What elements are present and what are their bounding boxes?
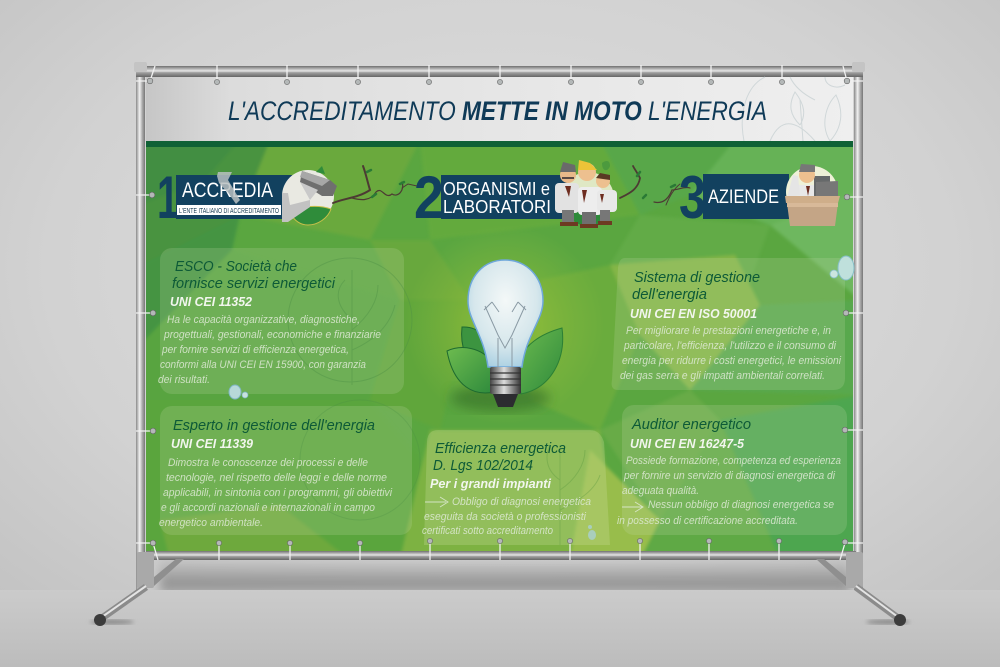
header stripe (146, 141, 853, 147)
left foot (90, 586, 146, 626)
body: Esperto: e gli accordi nazionali e internazionali in campo (161, 502, 375, 514)
body: ESCO: conformi alla UNI CEI EN 15900, con garanzia (160, 359, 366, 371)
body: ESCO: Ha le capacità organizzative, diagnostiche, (167, 314, 360, 326)
title: L'ACCREDITAMENTO METTE IN MOTO L'ENERGIA (228, 96, 767, 126)
body: Sistema: Per migliorare le prestazioni energetiche e, in (626, 325, 831, 337)
norm: UNI CEI EN ISO 50001: UNI CEI EN ISO 50001 (630, 306, 757, 321)
label 1: Accredia (157, 164, 337, 231)
body: ESCO (158, 314, 381, 386)
arrow: Nessun obbligo (622, 502, 643, 512)
body: Esperto: tecnologie, nel rispetto delle leggi e delle norme (166, 472, 387, 484)
body: ESCO: dei risultati. (158, 374, 210, 386)
icon: manager at desk (785, 164, 840, 226)
leaf back (462, 327, 496, 372)
label 2: Organismi e Laboratori (414, 160, 617, 231)
body: Esperto: energetico ambientale. (159, 517, 263, 529)
heading: Sistema: Sistema di gestione (634, 269, 760, 286)
branch between 2 and 3 (620, 166, 690, 205)
banner header band (146, 77, 853, 142)
panel: ESCO (158, 248, 412, 394)
label 3: Aziende (679, 164, 840, 231)
body: Sistema: dei gas serra e gli impatti ambientali correlati. (620, 370, 825, 382)
name: LABORATORI (443, 197, 551, 217)
body: ESCO: progettuali, gestionali, economiche e finanziarie (163, 329, 381, 341)
body: Esperto: applicabili, in sintonia con i programmi, gli obiettivi (163, 487, 393, 499)
norm: UNI CEI 11339: UNI CEI 11339 (171, 436, 254, 451)
norm: UNI CEI EN 16247-5: UNI CEI EN 16247-5 (630, 436, 745, 451)
heading: ESCO: fornisce servizi energetici (172, 275, 336, 292)
right foot (856, 586, 910, 626)
panel: Esperto in gestione dell'energia (159, 400, 420, 535)
body: Auditor: per fornire un servizio di diagnosi energetica di (623, 470, 836, 482)
decorative circle (300, 400, 420, 520)
numeral 1: 1 (157, 164, 179, 231)
body: Auditor (617, 455, 841, 527)
decorative tree (288, 258, 412, 385)
subtitle strip: L'ENTE ITALIANO DI ACCREDITAMENTO (179, 206, 279, 215)
body: Sistema: energia per ridurre i costi energetici, le emissioni (622, 355, 842, 367)
body: Auditor: Possiede formazione, competenza ed esperienza (626, 455, 841, 467)
body: Sistema (620, 325, 842, 382)
body: Efficienza: certificati sotto accreditamento (422, 525, 553, 537)
heading: ESCO (172, 258, 336, 292)
bar (441, 175, 567, 219)
icon: Italy silhouette (217, 172, 240, 204)
branch between 1 and 2 (333, 166, 417, 203)
filament (484, 302, 526, 367)
bulb screw base (490, 367, 521, 407)
heading: Auditor: Auditor energetico (631, 416, 751, 433)
body: Auditor: Nessun obbligo di diagnosi energetica se (648, 499, 834, 511)
norm: UNI CEI 11352: UNI CEI 11352 (170, 294, 253, 309)
heading: ESCO: ESCO - Società che (175, 258, 297, 275)
bar (176, 175, 292, 219)
bar (703, 174, 789, 219)
name: AZIENDE (708, 187, 779, 208)
body: Esperto (159, 457, 393, 529)
body: Efficienza: eseguita da società o professionisti (424, 511, 587, 523)
icon: three people (555, 160, 617, 228)
icon: camera circle (282, 166, 337, 225)
leaf left (447, 348, 494, 393)
body: Efficienza (422, 496, 591, 537)
body: Esperto: Dimostra le conoscenze dei processi e delle (168, 457, 368, 469)
numeral 3: 3 (679, 164, 706, 231)
body: Sistema: particolare, l'efficienza, l'utilizzo e il consumo di (623, 340, 837, 352)
name (443, 179, 551, 217)
name: ORGANISMI e (443, 179, 550, 199)
eyelets and ties (136, 65, 863, 560)
arrow: Obbligo (425, 497, 448, 507)
name: ACCREDIA (182, 179, 273, 202)
heading: Sistema: dell'energia (632, 286, 707, 303)
panel: Efficienza energetica (422, 430, 610, 545)
illustration: light bulb with leaves (447, 260, 563, 412)
panel: Auditor energetico (617, 405, 847, 535)
icon: water drops left (229, 385, 248, 399)
panel: Sistema di gestione dell'energia (612, 258, 845, 390)
icon: water drops right (830, 256, 854, 280)
heading: Esperto: Esperto in gestione dell'energia (173, 417, 375, 434)
body: Efficienza: Obbligo di diagnosi energetica (452, 496, 591, 508)
heading: Efficienza (433, 440, 566, 474)
leaf right (516, 328, 563, 394)
heading: Efficienza: D. Lgs 102/2014 (433, 457, 533, 474)
banner green low-poly background (140, 140, 860, 560)
icon: water drop centre (588, 525, 596, 540)
decorative leaves (547, 445, 600, 545)
subtitle strip (177, 205, 281, 215)
subheading: Per i grandi impianti: Per i grandi impianti (430, 476, 551, 491)
body: Auditor: adeguata qualità. (622, 485, 699, 497)
bulb glass (468, 260, 543, 367)
numeral 2: 2 (414, 164, 444, 231)
banner stand frame (134, 62, 865, 590)
body: ESCO: per fornire servizi di efficienza energetica, (161, 344, 349, 356)
heading: Efficienza: Efficienza energetica (435, 440, 566, 457)
body: Auditor: in possesso di certificazione accreditata. (617, 515, 798, 527)
heading: Sistema (632, 269, 760, 303)
